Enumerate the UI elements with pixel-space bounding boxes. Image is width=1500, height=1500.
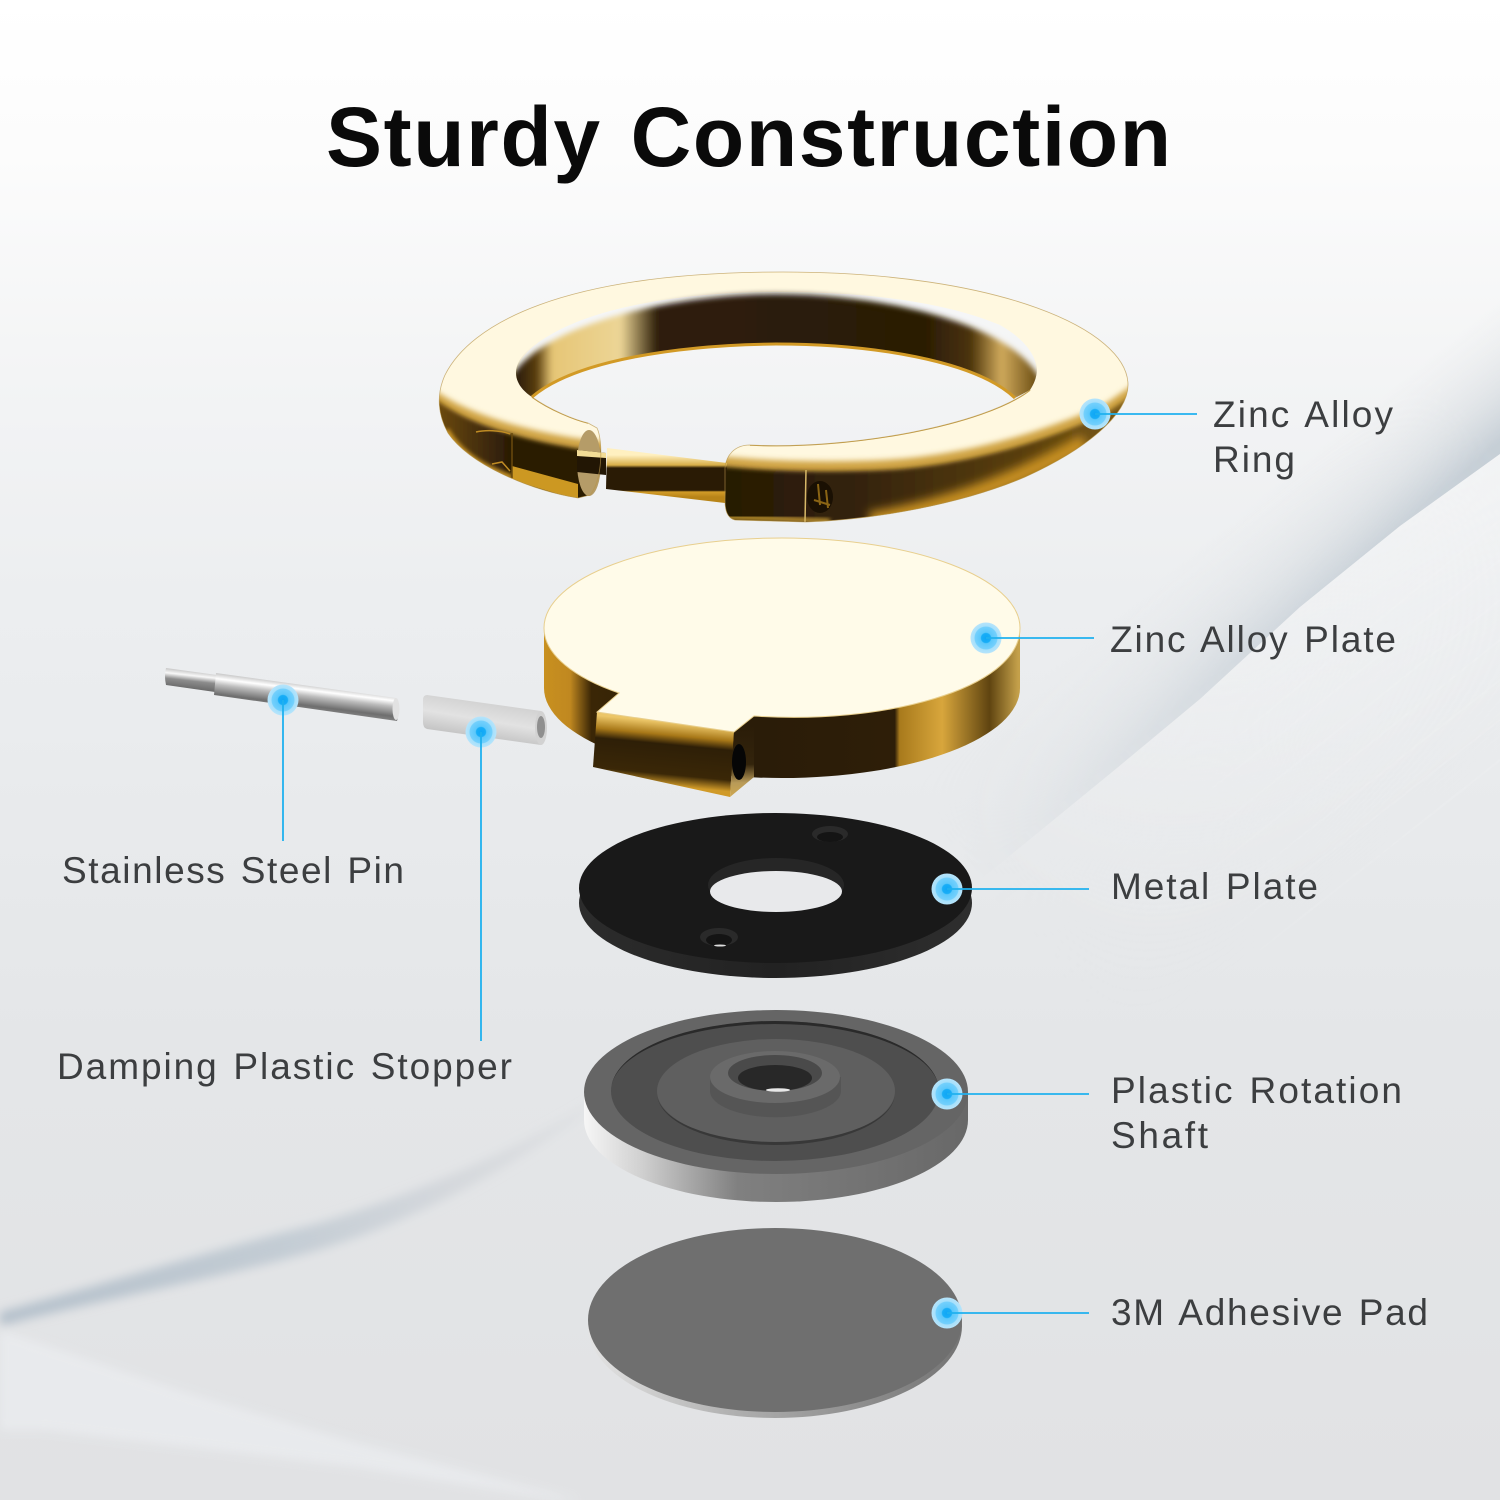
callout: zinc alloy ring: Ring (1213, 439, 1295, 480)
ring band (439, 272, 1128, 522)
ring far inner wall (505, 294, 1045, 400)
callout: zinc alloy ring (1080, 394, 1394, 480)
metal plate centre hole (708, 858, 844, 912)
callout: zinc alloy plate (970, 619, 1396, 660)
shaft top (584, 1010, 968, 1174)
callout: plastic rotation shaft (932, 1070, 1402, 1156)
callout: zinc alloy ring: Zinc Alloy (1213, 394, 1394, 435)
part: zinc alloy ring (438, 272, 1128, 522)
plate tab front (593, 712, 734, 797)
shaft side (584, 1092, 968, 1202)
metal plate screw hole lower (700, 928, 738, 946)
callout: stainless steel pin (62, 684, 404, 891)
callout: damping plastic stopper: Damping Plastic Stopper (57, 1046, 512, 1087)
title: Sturdy Construction (326, 90, 1171, 184)
part: zinc alloy plate (544, 538, 1020, 797)
plate top face (544, 538, 1020, 732)
callout: stainless steel pin: Stainless Steel Pin (62, 850, 404, 891)
metal plate edge (579, 828, 972, 978)
callout: metal plate: Metal Plate (1111, 866, 1318, 907)
ring outline (439, 272, 1128, 522)
callout: plastic rotation shaft: Shaft (1111, 1115, 1209, 1156)
plate tab bevel (730, 715, 754, 797)
ring wall bottom lip (532, 344, 1015, 398)
callout: zinc alloy plate: Zinc Alloy Plate (1110, 619, 1396, 660)
callout: 3m adhesive pad (932, 1292, 1428, 1333)
callout: metal plate (932, 866, 1318, 907)
metal plate screw hole upper (812, 826, 848, 842)
callout: damping plastic stopper (57, 716, 512, 1087)
plate side wall (544, 628, 1020, 778)
ring clasp pin (577, 448, 727, 503)
pad face (588, 1228, 962, 1412)
metal plate top (579, 813, 972, 963)
part: 3m adhesive pad (588, 1228, 962, 1418)
part: plastic rotation shaft (584, 1010, 968, 1202)
shaft raised ring (657, 1039, 895, 1143)
ring open end face (577, 430, 601, 496)
part: damping plastic stopper (423, 695, 547, 745)
callout: 3m adhesive pad: 3M Adhesive Pad (1111, 1292, 1428, 1333)
pad edge (588, 1234, 962, 1418)
part: stainless steel pin (165, 668, 400, 721)
callout: plastic rotation shaft: Plastic Rotation (1111, 1070, 1402, 1111)
shaft hub (710, 1051, 841, 1117)
shaft groove (611, 1021, 939, 1161)
part: metal plate (579, 813, 972, 978)
plate tab hole (732, 744, 746, 780)
